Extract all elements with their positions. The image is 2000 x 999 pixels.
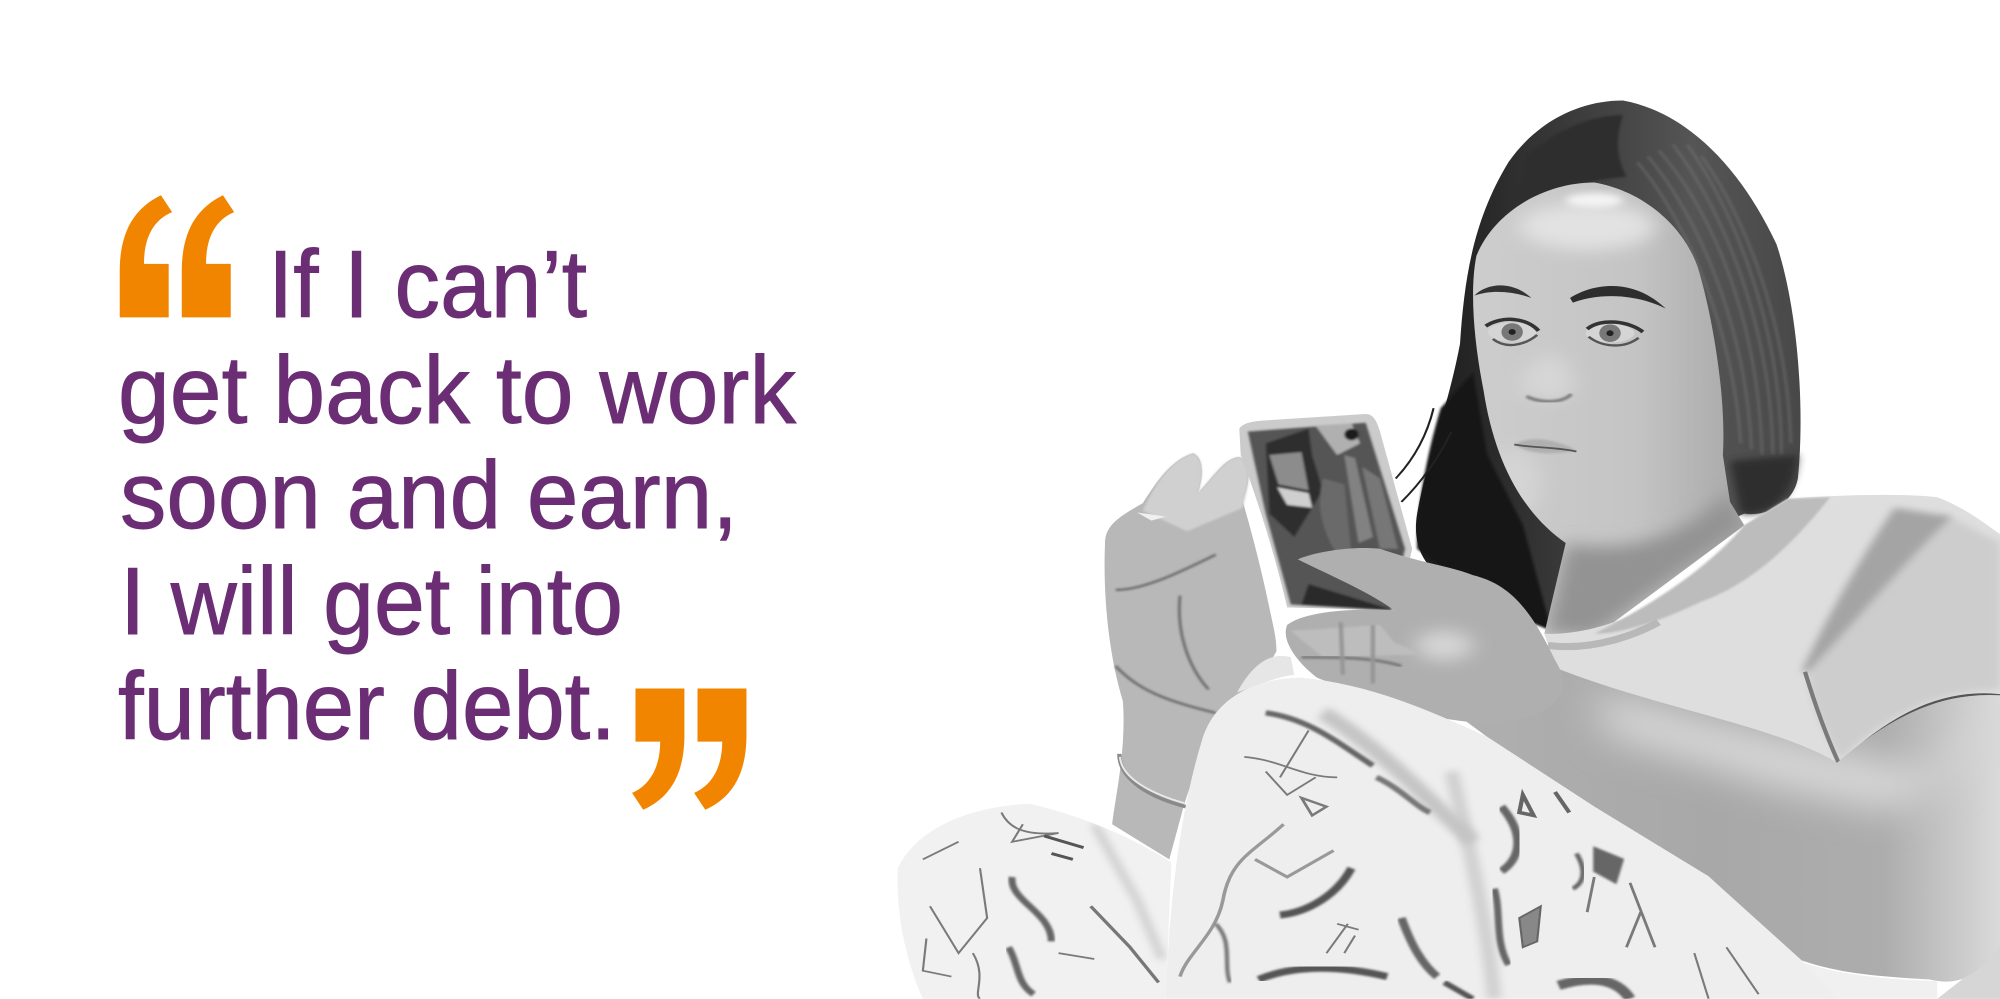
- mouth: [1514, 439, 1576, 453]
- arm: [1423, 666, 2000, 999]
- pyjama trousers: front leg: [1166, 678, 1837, 999]
- neck and face: [1473, 183, 1744, 637]
- eyes: [1488, 323, 1536, 341]
- hair: [1396, 101, 1801, 634]
- icon: opening quotation mark: [120, 195, 234, 317]
- left hand and wrist: [1105, 453, 1294, 859]
- line 3: soon and earn,: [120, 442, 738, 549]
- nose: [1520, 352, 1574, 399]
- quote text: [118, 231, 797, 760]
- photo: woman looking at her phone: [898, 101, 2000, 999]
- line 1: If I can’t: [268, 231, 587, 338]
- line 2: get back to work: [118, 337, 797, 444]
- line 4: I will get into: [120, 548, 623, 655]
- eyebrows: [1474, 285, 1531, 298]
- T-shirt: [1544, 495, 2000, 763]
- phone: [1239, 414, 1412, 610]
- icon: closing quotation mark: [632, 689, 746, 810]
- pyjama trousers: rear leg: [898, 804, 1171, 999]
- right hand: [1286, 548, 1564, 723]
- line 5: further debt.: [118, 653, 616, 760]
